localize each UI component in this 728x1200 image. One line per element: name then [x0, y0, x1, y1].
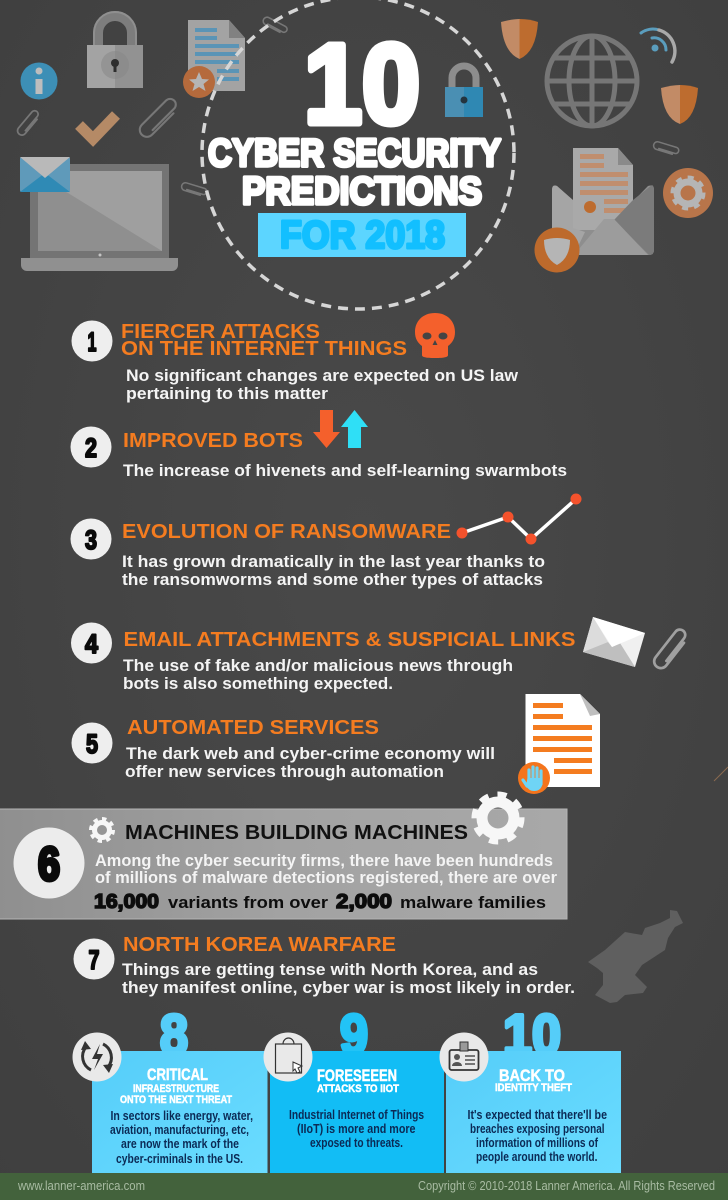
icon badge: power cycle	[72, 1032, 122, 1082]
number badge 2	[70, 426, 112, 468]
icon: skull	[415, 313, 455, 358]
number badge 6: 6	[38, 837, 60, 890]
body 4: bots is also something expected.	[123, 674, 393, 693]
icon: document with blue lines	[188, 20, 245, 91]
icon: blue envelope	[20, 157, 70, 192]
heading 6: MACHINES BUILDING MACHINES	[125, 822, 468, 844]
footer url: www.lanner-america.com	[17, 1179, 145, 1193]
number badge 1: 1	[88, 327, 96, 357]
panel: prediction 9	[264, 1003, 444, 1173]
title banner: for 2018: FOR 2018	[280, 214, 445, 257]
number badge 6	[14, 828, 84, 898]
card 9 title: FORESEEEN	[317, 1066, 397, 1085]
number badge 2: 2	[85, 433, 97, 463]
body 6	[95, 851, 557, 887]
body 3: the ransomworms and some other types of attacks	[122, 570, 543, 589]
prediction 3	[70, 494, 582, 589]
body 7: Things are getting tense with North Korea, and as	[122, 960, 538, 979]
prediction 2	[70, 410, 567, 480]
statistics line	[94, 891, 546, 913]
number badge 5: 5	[86, 729, 98, 759]
card 9 body	[289, 1108, 424, 1150]
card 8 title: CRITICAL	[147, 1065, 208, 1084]
statistics line: malware families	[400, 893, 546, 912]
prediction 5	[72, 694, 600, 794]
icon: globe	[547, 36, 637, 126]
card 10 title: IDENTITY THEFT	[495, 1082, 572, 1094]
icon: paperclip	[651, 627, 690, 671]
icon: top paperclip	[262, 16, 288, 35]
icon: orange-lined document	[526, 694, 600, 787]
card 8 body	[110, 1109, 253, 1166]
faint diagonal line	[714, 767, 728, 781]
number badge 1	[72, 320, 112, 362]
icon: open envelope with document	[552, 148, 654, 255]
body 4: The use of fake and/or malicious news through	[123, 656, 513, 675]
heading 3: EVOLUTION OF RANSOMWARE	[122, 521, 451, 543]
number 9: 9	[340, 1003, 368, 1067]
card 8 title	[120, 1065, 232, 1106]
body 1: pertaining to this matter	[126, 384, 328, 403]
card 8 body: are now the mark of the	[121, 1137, 239, 1151]
heading 1: FIERCER ATTACKS	[121, 321, 320, 343]
body 1	[126, 366, 519, 403]
icon: shield lower	[661, 85, 698, 124]
body 6: Among the cyber security firms, there have been hundreds	[95, 851, 553, 870]
icon badge: ID card	[440, 1032, 488, 1082]
body 5: offer new services through automation	[125, 762, 444, 781]
card 10 body	[468, 1108, 607, 1164]
title: 10	[304, 21, 420, 147]
body 2: The increase of hivenets and self-learning swarmbots	[123, 461, 567, 480]
icon: info circle	[20, 62, 58, 100]
prediction 4	[71, 617, 690, 693]
heading 5: AUTOMATED SERVICES	[127, 717, 379, 739]
icon: large gear	[475, 795, 521, 841]
body 7	[122, 960, 575, 997]
line chart icon	[456, 494, 582, 544]
card 9 background	[270, 1051, 444, 1173]
title: PREDICTIONS	[242, 170, 482, 213]
icon: shield	[501, 19, 538, 59]
icon: shield badge	[534, 228, 580, 272]
body 5	[125, 744, 495, 781]
panel: prediction 10	[440, 1003, 621, 1173]
body 4	[123, 656, 513, 693]
statistics line: variants from over	[168, 893, 328, 912]
body 1: No significant changes are expected on US law	[126, 366, 519, 385]
footer bar	[0, 1173, 728, 1200]
prediction 7	[74, 934, 575, 997]
header decorative icons, right	[445, 19, 713, 272]
card 9 body: (IIoT) is more and more	[297, 1122, 416, 1136]
number 10: 10	[503, 1003, 561, 1067]
card 10 title: BACK TO	[499, 1066, 565, 1085]
icon: blue padlock	[445, 66, 483, 117]
icon: up arrow	[341, 410, 368, 448]
number badge 5	[72, 722, 112, 764]
card 8 background	[92, 1051, 268, 1173]
body 7: they manifest online, cyber war is most likely in order.	[122, 978, 575, 997]
body 5: The dark web and cyber-crime economy will	[126, 744, 495, 763]
prediction 1	[72, 313, 519, 403]
heading 2: IMPROVED BOTS	[123, 430, 303, 452]
number badge 7: 7	[88, 945, 100, 975]
card 8 body: aviation, manufacturing, etc,	[110, 1123, 249, 1137]
number badge 4: 4	[85, 629, 98, 659]
panel: prediction 8	[72, 1003, 268, 1173]
icon: small paperclip	[16, 109, 41, 137]
icon: down arrow	[313, 410, 340, 448]
icon: star badge	[183, 66, 215, 98]
number badge 3	[70, 518, 112, 560]
icon: wifi signal	[641, 29, 675, 62]
card 8 body: In sectors like energy, water,	[110, 1109, 253, 1123]
icon: check mark	[79, 115, 116, 139]
panel: prediction 6	[0, 795, 567, 919]
card 9 title	[317, 1066, 399, 1095]
statistics line: 2,000	[336, 891, 392, 913]
card 10 body: information of millions of	[476, 1136, 599, 1150]
icon: laptop	[21, 164, 178, 271]
body 3: It has grown dramatically in the last year thanks to	[122, 552, 545, 571]
icon: padlock	[87, 12, 143, 88]
heading 1	[121, 321, 407, 360]
header decorative icons, left	[16, 12, 288, 271]
number badge 3: 3	[85, 525, 97, 555]
number 8: 8	[160, 1003, 188, 1067]
body 6: of millions of malware detections registered, there are over	[95, 868, 557, 887]
map: North Korea	[588, 910, 683, 1003]
card 8 title: INFRAESTRUCTURE	[133, 1083, 219, 1095]
card 9 body: exposed to threats.	[310, 1136, 403, 1150]
card 9 body: Industrial Internet of Things	[289, 1108, 424, 1122]
dashed title circle	[202, 0, 514, 309]
body 3	[122, 552, 545, 589]
icon: medium paperclip	[137, 97, 180, 140]
heading 1: ON THE INTERNET THINGS	[121, 338, 407, 360]
card 9 title: ATTACKS TO IIOT	[317, 1083, 399, 1095]
icon badge: shopping bag with cursor	[264, 1032, 312, 1082]
icon: white envelope	[583, 617, 645, 667]
heading 7: NORTH KOREA WARFARE	[123, 934, 396, 956]
card 8 title: ONTO THE NEXT THREAT	[120, 1094, 232, 1106]
icon: gear badge	[663, 168, 713, 218]
card 10 title	[495, 1066, 572, 1094]
title	[208, 21, 501, 213]
icon: stop hand badge	[518, 762, 550, 794]
title: CYBER SECURITY	[208, 132, 501, 175]
number badge 7	[74, 938, 114, 980]
heading 4: EMAIL ATTACHMENTS & SUSPICIAL LINKS	[124, 629, 576, 651]
icon: paperclip by the circle	[181, 182, 207, 197]
card 8 body: cyber-criminals in the US.	[116, 1152, 243, 1166]
card 10 body: It's expected that there'll be	[468, 1108, 607, 1122]
number badge 4	[71, 622, 112, 664]
card 10 background	[446, 1051, 621, 1173]
icon: paperclip right	[653, 141, 679, 156]
card 10 body: people around the world.	[476, 1150, 598, 1164]
card 10 body: breaches exposing personal	[470, 1122, 604, 1136]
statistics line: 16,000	[94, 891, 159, 913]
icon: small gear	[91, 819, 113, 841]
